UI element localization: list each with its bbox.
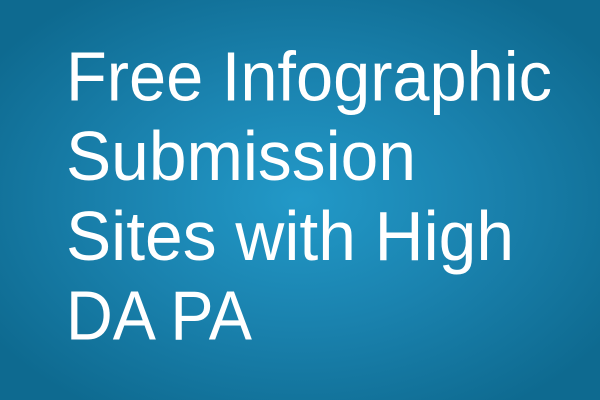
title: Free Infographic <box>66 38 552 116</box>
title: Sites with High <box>66 197 514 275</box>
title: Submission <box>66 117 416 195</box>
title: DA PA <box>66 276 252 354</box>
